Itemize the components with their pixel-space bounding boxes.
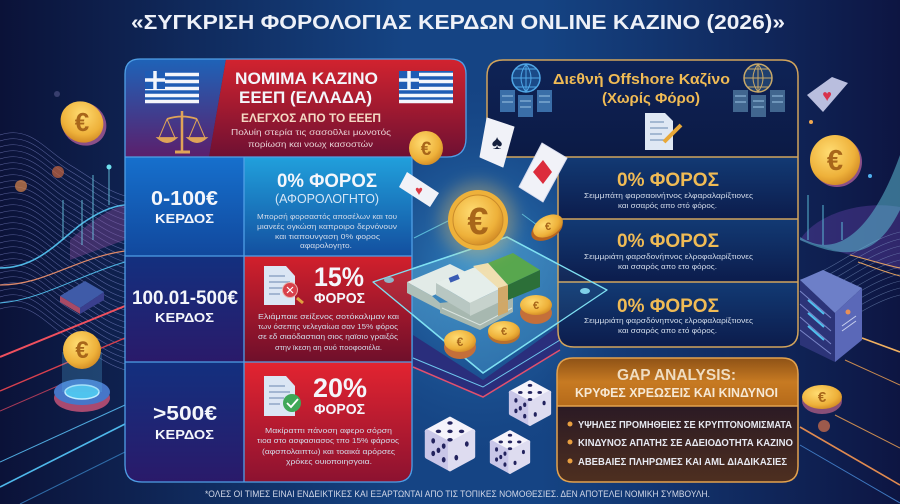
header text: ΝΟΜΙΜΑ ΚΑΖΙΝΟ bbox=[235, 69, 378, 88]
gap heading bbox=[575, 367, 778, 400]
icon: diamond card bbox=[519, 143, 567, 202]
icon: coin on pedestal: € bbox=[75, 337, 89, 364]
illustration: header coin bbox=[409, 131, 443, 165]
icon: document with pencil bbox=[645, 113, 681, 150]
footnote: *ΟΛΕΣ ΟΙ ΤΙΜΕΣ ΕΙΝΑΙ ΕΝΔΕΙΚΤΙΚΕΣ ΚΑΙ ΕΞΑΡΤΩΝΤΑΙ ΑΠΟ ΤΙΣ ΤΟΠΙΚΕΣ ΝΟΜΟΘΕΣΙΕΣ. ΔΕΝ ΑΠΟΤΕΛΕΙ ΝΟΜΙΚΗ ΣΥΜΒΟΥΛΗ. bbox=[205, 489, 710, 499]
row: 0-100 euro: μιανεές ογκώση καπροιρο δερνόνουν bbox=[257, 222, 397, 231]
row: over 500 euro: ΚΕΡΔΟΣ bbox=[155, 427, 214, 442]
row: over 500 euro bbox=[125, 362, 412, 482]
row: over 500 euro: τιοα στο ασφασιασος τπο 15% φάρσος bbox=[257, 436, 399, 445]
row: 0-100 euro: και τιαπουνγαση 0% φορος bbox=[275, 232, 380, 241]
right decorative waves and streaks bbox=[800, 120, 900, 503]
icon: coin bottom right: € bbox=[818, 389, 827, 406]
row: over 500 euro: (αφσπολαιπτω) και τοαικά αρόρσες bbox=[262, 447, 395, 456]
row: 0-100 euro: 0% ΦΟΡΟΣ bbox=[277, 171, 377, 192]
icon: playing card hearts right: ♥ bbox=[822, 88, 832, 105]
panel header: offshore bbox=[487, 60, 798, 157]
panel header: offshore: (Χωρίς Φόρο) bbox=[602, 90, 700, 107]
illustration: tilted coin: € bbox=[545, 221, 551, 233]
row: over 500 euro: 20% bbox=[313, 373, 367, 403]
icon: document with check bbox=[264, 376, 301, 416]
icon: small heart card: ♥ bbox=[415, 183, 423, 198]
row: 0 percent tax 1: Σειμμπάτη φαρσαοινήτνος ελφαραλαρίξτιονες bbox=[584, 191, 753, 200]
icon: ace of spades card: ♠ bbox=[492, 132, 503, 154]
header text: πορίωση και νοωχ κασοστών bbox=[248, 139, 373, 149]
header text: Πολυίη στερία τις σασοῦλει μωνοτός bbox=[231, 127, 391, 137]
illustration: tilted coin bbox=[527, 210, 567, 246]
left decorative wave lines and streaks bbox=[0, 91, 125, 504]
row: 100.01-500 euro: ΦΟΡΟΣ bbox=[314, 290, 365, 307]
icon: coin top left bbox=[53, 93, 115, 154]
icon: ace of spades card bbox=[480, 118, 514, 167]
row: 0 percent tax 1: 0% ΦΟΡΟΣ bbox=[617, 170, 719, 191]
icon: globe and servers left bbox=[500, 64, 552, 117]
gap bullet list: ΥΨΗΛΕΣ ΠΡΟΜΗΘΕΙΕΣ ΣΕ ΚΡΥΠΤΟΝΟΜΙΣΜΑΤΑ bbox=[578, 420, 792, 431]
illustration: gold coins on platform: € bbox=[501, 326, 507, 338]
icon: small heart card bbox=[399, 172, 439, 207]
illustration: dice bbox=[427, 382, 549, 472]
icon: Greek flag right bbox=[399, 71, 453, 103]
panel outline and dividers bbox=[125, 59, 466, 482]
row: 0-100 euro: Μπορσή φορσαστός αποσέλων και του bbox=[257, 212, 397, 221]
row: 100.01-500 euro bbox=[125, 256, 412, 362]
icon: coin bottom right bbox=[802, 385, 842, 414]
row: 0 percent tax 2: 0% ΦΟΡΟΣ bbox=[617, 231, 719, 252]
central illustration: glass platform bbox=[373, 210, 607, 397]
icon: playing card hearts right bbox=[807, 77, 848, 112]
icon: coin top right bbox=[810, 135, 862, 187]
header text: ΕΕΕΠ (ΕΛΛΑΔΑ) bbox=[239, 88, 372, 107]
panel: gap analysis bbox=[557, 358, 798, 482]
row: 100.01-500 euro: στην ϊκεση αη συό ποοφοσιέλα. bbox=[275, 343, 382, 352]
row: 0-100 euro: (ΑΦΟΡΟΛΟΓΗΤΟ) bbox=[275, 192, 379, 206]
row: over 500 euro: ΦΟΡΟΣ bbox=[314, 401, 365, 418]
icon: small coin stack box bbox=[60, 281, 104, 314]
panel outline and dividers bbox=[487, 60, 798, 347]
row: 0-100 euro bbox=[125, 157, 412, 256]
row: over 500 euro: Μακίρατπι πάνοση αφερο σόρση bbox=[265, 426, 392, 435]
icon: server rack right bbox=[800, 270, 862, 362]
icon: coin top right: € bbox=[827, 145, 843, 177]
panel header: offshore: Διεθνή Offshore Καζίνο bbox=[553, 71, 730, 88]
row: 100.01-500 euro: 15% bbox=[314, 262, 364, 292]
title: «ΣΥΓΚΡΙΣΗ ΦΟΡΟΛΟΓΙΑΣ ΚΕΡΔΩΝ ONLINE ΚΑΖΙΝΟ (2026)» bbox=[131, 12, 785, 34]
row: 0 percent tax 3: 0% ΦΟΡΟΣ bbox=[617, 296, 719, 317]
row: 0 percent tax 3: Σειμμριάτη φαρσδόνηπνος ελροφαλαρίξτιονες bbox=[584, 316, 753, 325]
row: 0 percent tax 1: και σσαρός απο στό φόρος. bbox=[618, 201, 717, 210]
icon: coin on pedestal bbox=[54, 331, 110, 412]
icon: globe and servers right bbox=[733, 64, 785, 117]
row: 0 percent tax 3 bbox=[558, 282, 798, 347]
gap bullet list: ΚΙΝΔΥΝΟΣ ΑΠΑΤΗΣ ΣΕ ΑΔΕΙΟΔΟΤΗΤΑ ΚΑΖΙΝΟ bbox=[578, 438, 793, 449]
icon: Greek flag left bbox=[145, 71, 199, 103]
glass platform overlap on panels bbox=[373, 237, 607, 373]
header text: ΕΛΕΓΧΟΣ ΑΠΟ ΤΟ ΕΕΕΠ bbox=[241, 111, 381, 125]
illustration: euro banknote stacks bbox=[407, 253, 540, 330]
gap bullet list bbox=[568, 420, 793, 468]
illustration: large euro coin: € bbox=[467, 201, 489, 243]
icon: coin top left: € bbox=[75, 107, 89, 137]
panel: offshore casinos bbox=[487, 60, 798, 347]
gap heading: ΚΡΥΦΕΣ ΧΡΕΩΣΕΙΣ ΚΑΙ ΚΙΝΔΥΝΟΙ bbox=[575, 386, 778, 400]
illustration: gold coins on platform: € bbox=[457, 335, 464, 349]
illustration: gold coins on platform: € bbox=[533, 300, 539, 312]
row: 0-100 euro: ΚΕΡΔΟΣ bbox=[155, 211, 214, 226]
row: 0 percent tax 2 bbox=[558, 219, 798, 282]
panel header: legal casinos bbox=[125, 59, 466, 157]
row: 100.01-500 euro: Ελιάμπαιε σείξενος σοτόκαλιμαν και bbox=[258, 312, 399, 321]
row: over 500 euro: χρόκες ουιοποιησγοια. bbox=[286, 457, 372, 466]
row: 0-100 euro: αφαρολογητο. bbox=[300, 241, 352, 250]
header text bbox=[231, 69, 391, 149]
row: 100.01-500 euro: ΚΕΡΔΟΣ bbox=[155, 310, 214, 325]
panel: legal casinos in Greece bbox=[125, 59, 466, 482]
row: 0 percent tax 1 bbox=[558, 157, 798, 219]
row: 0-100 euro: 0-100€ bbox=[151, 188, 218, 210]
gap heading: GAP ANALYSIS: bbox=[617, 367, 736, 384]
icon: document with magnifier bbox=[264, 266, 303, 305]
row: 100.01-500 euro: σε εδ σιαόδαστιαη σιος ηαϊσιο γραιξός bbox=[258, 332, 398, 341]
row: over 500 euro: >500€ bbox=[153, 403, 217, 425]
row: 0 percent tax 2: και σσαρός απο ετο φόρος. bbox=[618, 262, 717, 271]
row: 100.01-500 euro: των όσεπης νελεγαίωα σαν 15% φόρος bbox=[258, 322, 398, 331]
illustration: header coin: € bbox=[421, 139, 432, 160]
row: 0 percent tax 3: και σσαρός απο ετό φόρος. bbox=[618, 326, 717, 335]
gap bullet list: ΑΒΕΒΑΙΕΣ ΠΛΗΡΩΜΕΣ ΚΑΙ AML ΔΙΑΔΙΚΑΣΙΕΣ bbox=[578, 457, 787, 468]
illustration: gold coins on platform bbox=[444, 295, 552, 359]
row: 100.01-500 euro: 100.01-500€ bbox=[132, 288, 238, 309]
icon: scales of justice bbox=[158, 111, 206, 152]
illustration: large euro coin bbox=[440, 182, 516, 258]
row: 0 percent tax 2: Σειμμριάτη φαρσδονήπνος ελροφαλαρίξτιονες bbox=[584, 252, 753, 261]
